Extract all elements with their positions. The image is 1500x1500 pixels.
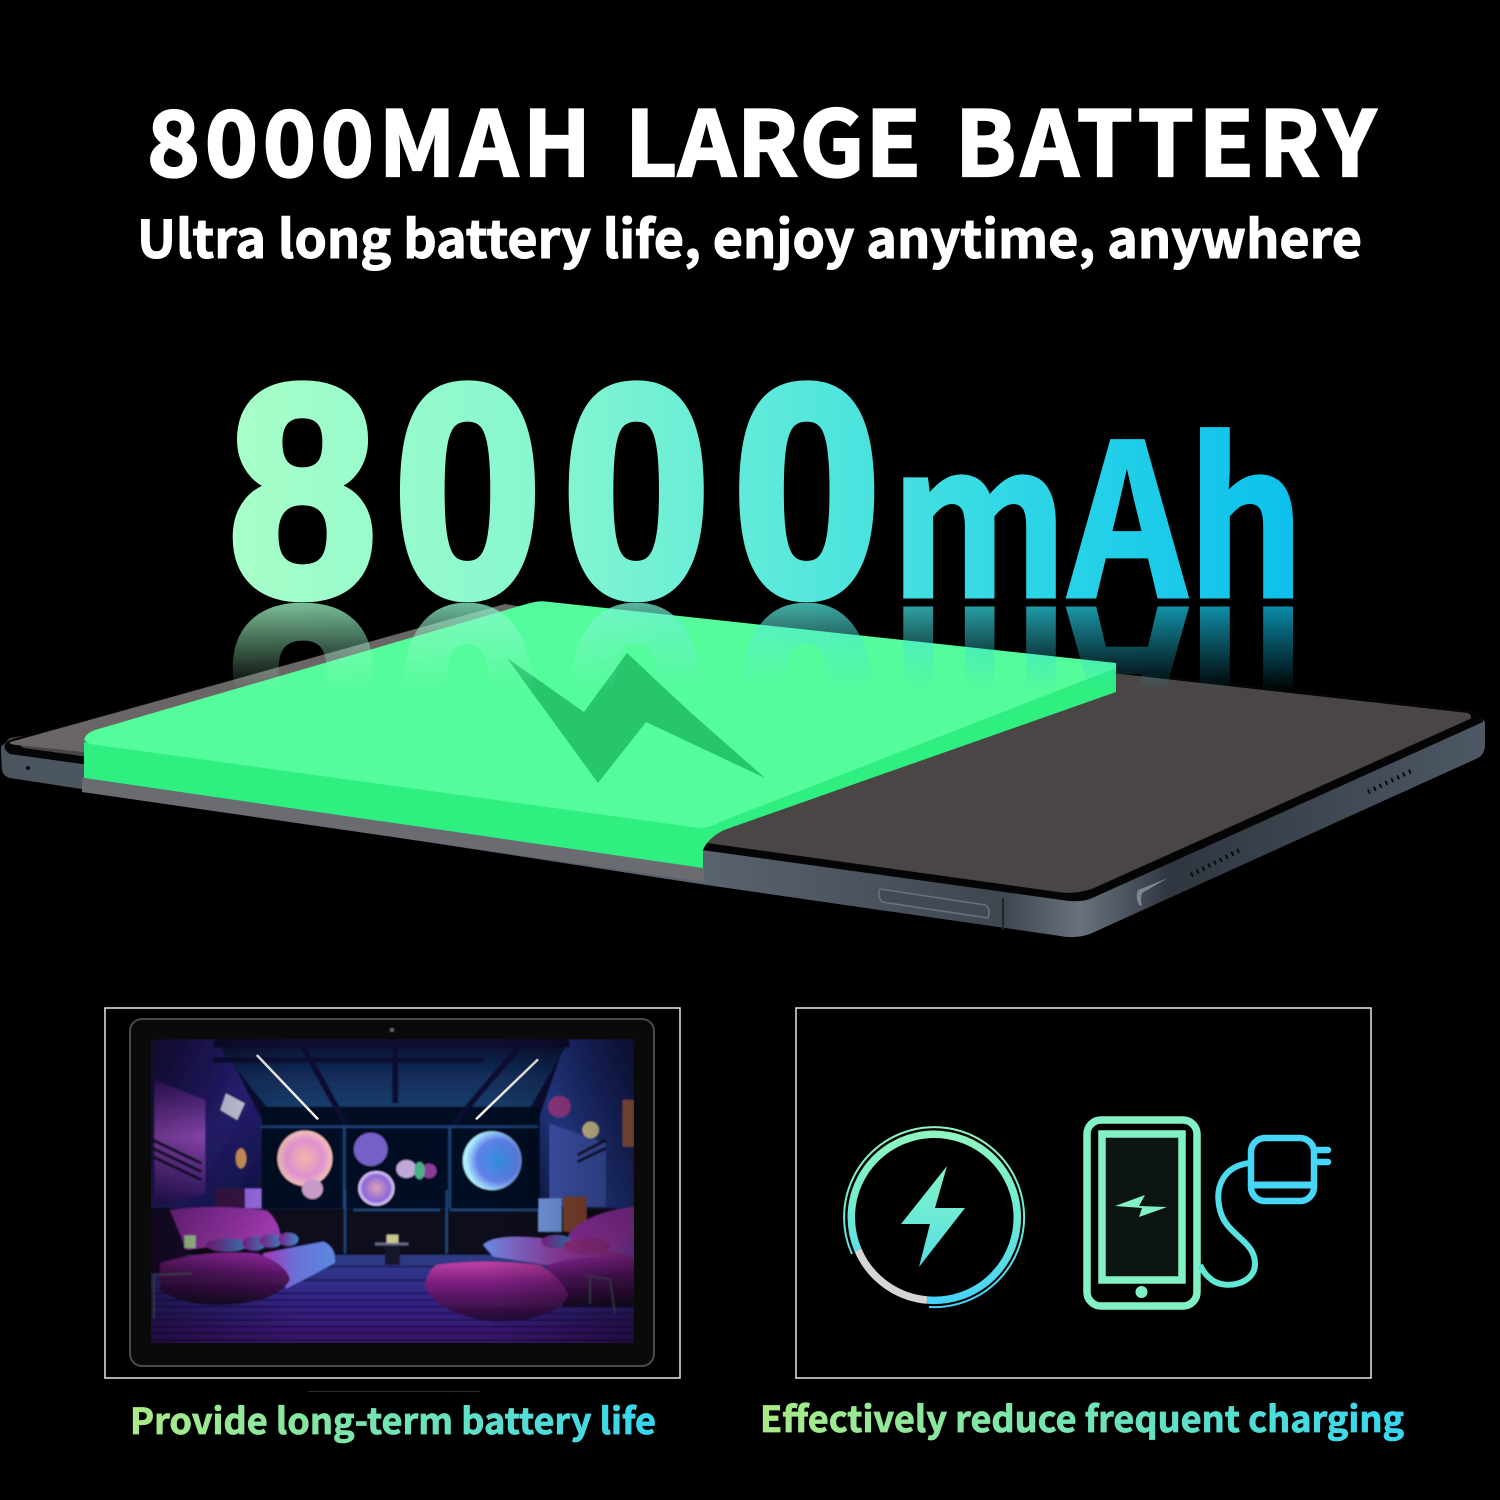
scene backdrop bbox=[151, 1039, 634, 1206]
left sofa dark end bbox=[150, 1210, 187, 1273]
cabinet right bbox=[538, 1198, 562, 1232]
panel: reduce frequent charging bbox=[796, 1008, 1371, 1378]
planet small pink bbox=[302, 1179, 323, 1199]
ring bolt bbox=[901, 1166, 965, 1267]
faint rule under panel bbox=[308, 1391, 480, 1392]
big capacity number: 8000mAh: mAh bbox=[890, 352, 1305, 658]
big capacity number: 8000mAh bbox=[228, 323, 1305, 660]
power button bbox=[1137, 878, 1168, 906]
right wall bbox=[536, 1039, 634, 1213]
tablet left screen strip bbox=[10, 604, 540, 752]
phone outline bbox=[1087, 1120, 1197, 1306]
right cushions bbox=[541, 1235, 572, 1248]
caption: reduce frequent charging: Effectively reduce frequent charging bbox=[760, 1391, 1404, 1443]
number reflection bbox=[232, 603, 1293, 688]
SIM tray bbox=[879, 889, 989, 918]
left side table bbox=[154, 1273, 192, 1318]
left cushions bbox=[206, 1238, 247, 1252]
right lower cushion bbox=[547, 1257, 635, 1307]
phone display bbox=[1102, 1134, 1182, 1280]
tablet front view bbox=[130, 1019, 654, 1366]
phone bolt bbox=[1115, 1195, 1167, 1217]
side seam bbox=[1002, 898, 1004, 930]
floor stripes bbox=[150, 1267, 640, 1340]
number reflection: mAh bbox=[890, 547, 1305, 853]
battery block bbox=[84, 601, 1116, 868]
subtitle: Ultra long battery life, enjoy anytime, anywhere bbox=[137, 198, 1362, 273]
charger body bbox=[1251, 1138, 1314, 1201]
lower frame strip bbox=[82, 778, 704, 882]
icon: phone on charger bbox=[1087, 1120, 1328, 1306]
home button bbox=[1136, 1286, 1148, 1298]
left wall bbox=[151, 1039, 265, 1213]
shelf lines bbox=[345, 1190, 540, 1253]
screen scene bbox=[145, 1033, 641, 1350]
icon: lightning bolt on battery bbox=[507, 653, 765, 783]
panel frame bbox=[105, 1008, 680, 1378]
left pouf bbox=[160, 1253, 290, 1305]
number reflection: 8000 bbox=[228, 545, 881, 882]
battery side face bbox=[84, 663, 1116, 868]
tablet side body bbox=[1, 640, 1485, 937]
caption: long-term battery life: Provide long-term battery life bbox=[130, 1393, 656, 1445]
title: 8000MAH bbox=[147, 72, 591, 202]
front camera bbox=[390, 1028, 394, 1032]
planet blue bbox=[463, 1131, 521, 1190]
lower room: floor and sofas bbox=[150, 1188, 640, 1348]
charger prongs bbox=[1316, 1150, 1328, 1162]
cable bbox=[1200, 1163, 1255, 1285]
camera dot bbox=[26, 766, 30, 770]
floor bbox=[150, 1255, 640, 1348]
speaker grille far bbox=[1368, 770, 1413, 792]
right side table bbox=[585, 1275, 615, 1313]
wall posters bbox=[155, 1080, 205, 1207]
speaker grille near bbox=[1191, 850, 1240, 875]
main ring bbox=[851, 1134, 1017, 1300]
title: BATTERY bbox=[955, 72, 1377, 202]
ceiling lights bbox=[257, 1055, 538, 1119]
ceiling beams bbox=[213, 1040, 570, 1128]
left sofa seat bbox=[263, 1242, 335, 1288]
planet glowing bbox=[358, 1171, 394, 1206]
battery top face bbox=[84, 601, 1116, 828]
floor pouf bbox=[425, 1262, 568, 1322]
icon: charging ring bbox=[844, 1127, 1024, 1307]
tablet screen bbox=[19, 605, 1471, 893]
planet cluster bbox=[396, 1160, 417, 1178]
planet pink bbox=[277, 1131, 332, 1186]
wall ornament bbox=[548, 1096, 571, 1117]
ring remaining segment bbox=[858, 1250, 927, 1300]
right sofa seat bbox=[483, 1237, 637, 1307]
cabinet left bbox=[245, 1188, 262, 1208]
planet violet bbox=[354, 1133, 388, 1166]
tablet glass top surface bbox=[5, 603, 1483, 901]
panel: long-term battery life bbox=[105, 1008, 680, 1378]
panel frame bbox=[796, 1008, 1371, 1378]
lower backdrop bbox=[150, 1208, 640, 1257]
right sofa back bbox=[568, 1206, 637, 1260]
big capacity number: 8000mAh: 8000 bbox=[228, 323, 881, 660]
title: LARGE bbox=[625, 72, 921, 202]
back wall bbox=[262, 1107, 540, 1217]
sofa status panel bbox=[184, 1235, 196, 1248]
left sofa back bbox=[170, 1207, 281, 1250]
tablet, angled view bbox=[1, 603, 1485, 937]
center table bbox=[385, 1245, 400, 1265]
screen edge vignette bbox=[151, 1039, 634, 1343]
charger band bbox=[1251, 1182, 1314, 1188]
ceiling bbox=[213, 1039, 570, 1110]
outer thin arcs bbox=[844, 1127, 1024, 1307]
